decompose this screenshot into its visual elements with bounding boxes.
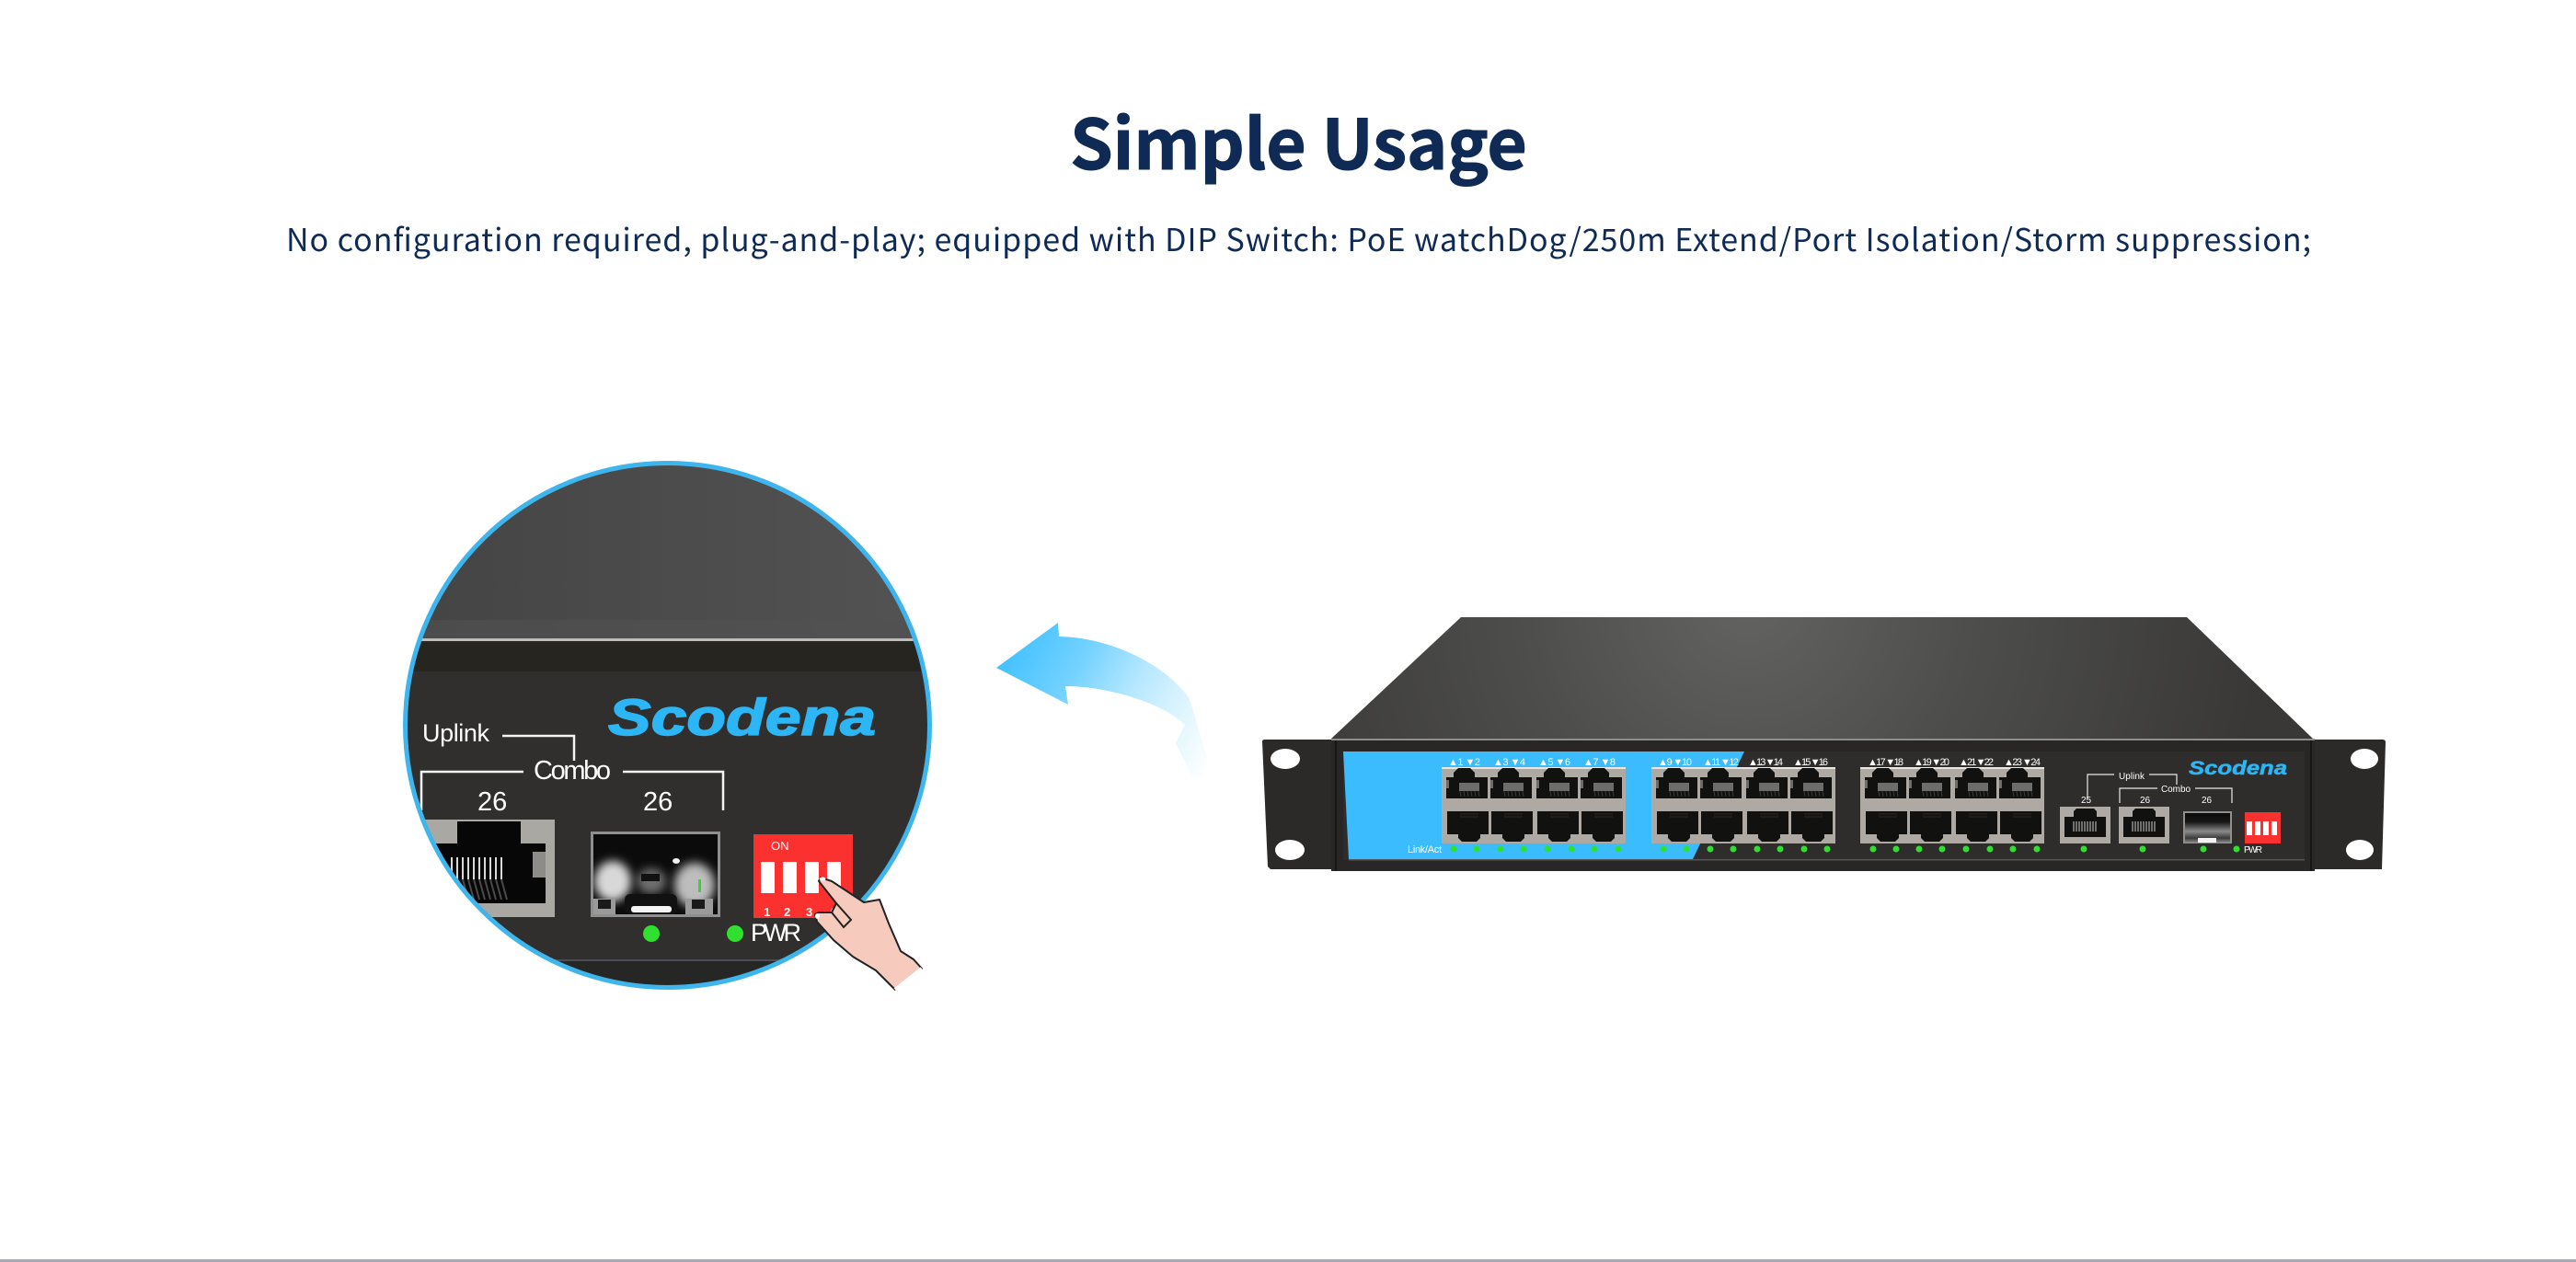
port number labels xyxy=(1448,757,2041,768)
chassis top xyxy=(1331,617,2313,739)
port number labels: ▲3 ▼4 xyxy=(1493,757,1525,768)
icon: hand pressing DIP switch xyxy=(815,878,922,990)
port number labels: ▲11 ▼12 xyxy=(1703,757,1739,768)
uplink and combo labels: 26 xyxy=(2140,796,2151,806)
LED port xyxy=(643,925,660,942)
arrow pointing to magnified circle xyxy=(996,623,1207,778)
port 26 RJ45 xyxy=(2119,807,2169,843)
title: Simple Usage xyxy=(1070,89,1527,189)
uplink and combo labels: 26 xyxy=(2202,796,2213,806)
chassis top surface (zoomed) xyxy=(422,465,913,638)
Uplink and Combo brackets xyxy=(421,736,723,810)
port 25 xyxy=(2060,807,2110,843)
uplink and combo labels xyxy=(2081,772,2232,806)
Link/Act label: Link/Act xyxy=(1408,844,1442,855)
port block 1-8 xyxy=(1442,767,1626,843)
port number labels: ▲1 ▼2 xyxy=(1448,757,1480,768)
switch product xyxy=(1262,617,2386,871)
port number right: 26 xyxy=(643,787,673,817)
DIP switch (zoomed): 1 xyxy=(764,905,770,919)
DIP switch (zoomed): 2 xyxy=(784,905,790,919)
port number labels: ▲7 ▼8 xyxy=(1583,757,1616,768)
port number labels: ▲21 ▼22 xyxy=(1959,757,1994,768)
uplink and combo labels: 25 xyxy=(2081,796,2092,806)
port block 17-24 xyxy=(1860,767,2044,843)
subtitle: No configuration required, plug-and-play; equipped with DIP Switch: PoE watchDog/250m Extend/Port Isolation/Storm suppression; xyxy=(286,215,2311,260)
port number labels: ▲13 ▼14 xyxy=(1748,757,1783,768)
Uplink label: Uplink xyxy=(422,719,489,747)
ON label: ON xyxy=(771,839,789,853)
PWR label: PWR xyxy=(2244,845,2262,855)
circle border xyxy=(405,464,929,988)
port number labels: ▲23 ▼24 xyxy=(2004,757,2041,768)
port 26 SFP xyxy=(2183,811,2232,843)
uplink and combo labels: Uplink xyxy=(2119,772,2145,782)
DIP switch xyxy=(2245,812,2281,843)
PWR label: PWR xyxy=(751,919,801,946)
left rack ear xyxy=(1262,740,1336,869)
port number labels: ▲15 ▼16 xyxy=(1793,757,1828,768)
brand logo (zoomed): Scodena xyxy=(608,688,876,746)
uplink and combo labels: Combo xyxy=(2161,785,2191,795)
magnified circle: switch detail xyxy=(401,460,935,991)
port number labels: ▲5 ▼6 xyxy=(1538,757,1570,768)
right rack ear xyxy=(2315,740,2386,869)
LED power xyxy=(727,925,743,942)
bottom divider xyxy=(0,1259,2576,1262)
port number left: 26 xyxy=(477,787,507,817)
DIP switch (zoomed): 4 xyxy=(829,905,836,919)
brand logo: Scodena xyxy=(2189,758,2287,779)
Combo label: Combo xyxy=(534,756,611,786)
DIP switch (zoomed): 3 xyxy=(806,905,812,919)
blue panel xyxy=(1343,751,1744,859)
RJ45 port (zoomed) xyxy=(425,820,555,917)
port number labels: ▲19 ▼20 xyxy=(1914,757,1949,768)
front panel (zoomed) xyxy=(401,671,935,959)
chassis front xyxy=(1331,739,2315,871)
DIP switch (zoomed) xyxy=(753,834,853,919)
port block 9-16 xyxy=(1651,767,1835,843)
port number labels: ▲9 ▼10 xyxy=(1658,757,1692,768)
SFP cage (zoomed) xyxy=(591,832,720,917)
status LEDs xyxy=(1450,846,2239,852)
port number labels: ▲17 ▼18 xyxy=(1868,757,1903,768)
